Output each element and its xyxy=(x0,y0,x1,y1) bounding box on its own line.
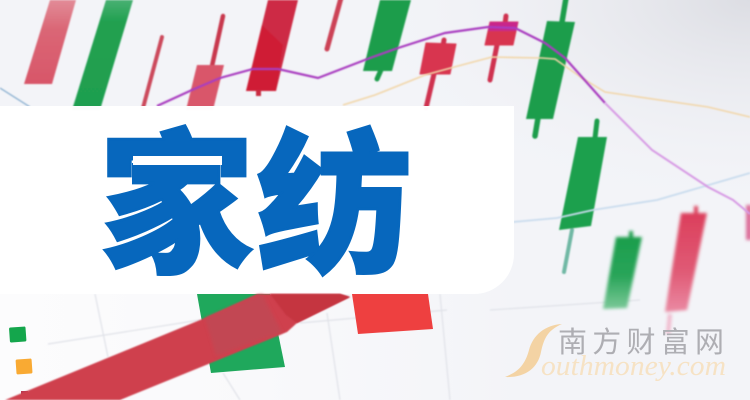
legend square: green xyxy=(9,326,26,343)
candle: red top xyxy=(485,16,518,80)
blurred candles at right xyxy=(603,205,750,334)
candle: red at right edge xyxy=(746,205,750,240)
legend square: orange xyxy=(16,358,33,375)
candle: faded red xyxy=(24,0,76,84)
title panel xyxy=(0,106,514,294)
bottom candle: green xyxy=(197,294,285,373)
candle: green tall xyxy=(72,0,133,110)
candle: red middle xyxy=(420,40,456,108)
moving average line: purple xyxy=(157,27,750,214)
pen dark band xyxy=(205,294,282,356)
candle: green lower xyxy=(559,121,607,272)
moving average line: blue xyxy=(0,88,750,222)
candlestick chart xyxy=(24,0,607,272)
candle: deep red xyxy=(246,0,298,96)
bottom candle: red xyxy=(352,294,433,334)
wick: upper thin red xyxy=(327,0,341,49)
legend square: partly hidden xyxy=(21,391,28,397)
candle: red with wick xyxy=(186,16,224,110)
candle: green upper xyxy=(363,0,411,79)
title text second character: 纺 xyxy=(257,120,412,293)
candle: blurred green xyxy=(603,231,642,309)
candle: green big xyxy=(526,0,575,136)
wick: thin red xyxy=(143,37,162,108)
chart grid lines xyxy=(48,294,640,400)
candle: blurred red xyxy=(665,206,707,334)
moving average line: orange xyxy=(343,57,750,117)
red pen xyxy=(5,294,350,400)
logo chinese name: 南方财富网 xyxy=(558,326,724,359)
title counter in first character xyxy=(133,156,222,165)
pen body xyxy=(5,294,350,400)
title text: 家 xyxy=(99,120,254,293)
logo latin name: outhmoney.com xyxy=(541,351,726,382)
logo swoosh xyxy=(505,324,562,377)
watermark: southmoney logo xyxy=(505,324,726,382)
pen tip xyxy=(270,294,350,323)
